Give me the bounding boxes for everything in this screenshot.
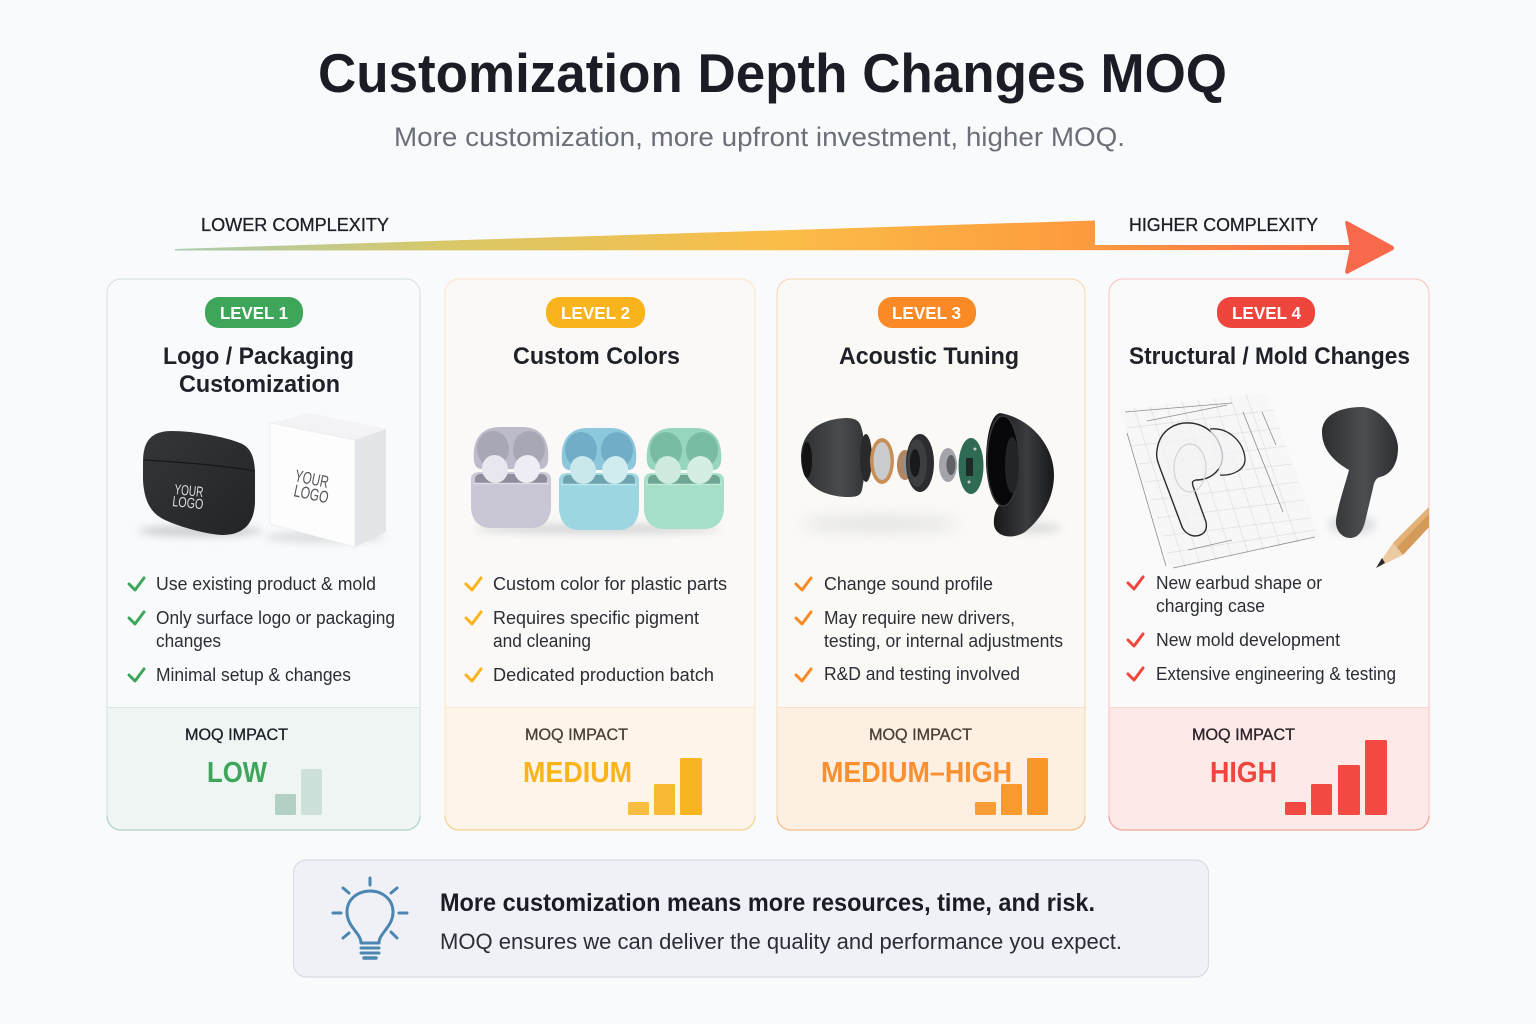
illustration: three coloured cases [471,427,724,534]
check list: Minimal setup & changes [156,665,351,685]
check list: testing, or internal adjustments [824,631,1063,651]
illustration: blueprint, earbud and pencil [1120,393,1430,569]
check list: changes [156,631,221,651]
check list: Only surface logo or packaging [156,608,395,628]
moq impact: medium-high: MEDIUM–HIGH [821,757,1012,789]
heading: logo / packaging [163,343,354,398]
check list: New mold development [1156,630,1340,650]
moq impact: medium: MOQ IMPACT [525,726,628,744]
panel: level 1 [107,279,420,830]
check list [466,574,727,685]
check list [1128,573,1396,684]
check list: R&D and testing involved [824,664,1020,684]
panel: level 4 [1109,279,1430,830]
badge: level 4: LEVEL 4 [1232,303,1301,323]
moq impact: high: HIGH [1210,757,1277,789]
moq impact: high [1192,726,1387,815]
badge: level 3: LEVEL 3 [892,303,961,323]
check list [796,574,1063,684]
badge: level 2 [546,297,645,328]
moq impact: medium-high: MOQ IMPACT [869,726,972,744]
label: higher complexity: HIGHER COMPLEXITY [1129,215,1318,235]
check list: Custom color for plastic parts [493,574,727,594]
check list: Change sound profile [824,574,993,594]
heading: logo / packaging: Customization [179,371,340,398]
illustration: black case and white box: LOGO [172,494,204,513]
moq impact: low [185,726,322,815]
check list: charging case [1156,596,1265,616]
check list: Extensive engineering & testing [1156,664,1396,684]
callout heading: More customization means more resources, time, and risk. [440,889,1095,917]
moq impact: medium: MEDIUM [523,757,632,789]
heading: logo / packaging: Logo / Packaging [163,343,354,370]
badge: level 2: LEVEL 2 [561,303,630,323]
label: lower complexity: LOWER COMPLEXITY [201,215,389,235]
check list: New earbud shape or [1156,573,1322,593]
badge: level 4 [1217,297,1315,328]
badge: level 1 [205,297,303,328]
icon: light bulb [333,878,407,958]
heading: structural / mold changes: Structural / Mold Changes [1129,343,1410,370]
check list: and cleaning [493,631,591,651]
check list: Requires specific pigment [493,608,699,628]
illustration: black case and white box: LOGO [292,481,330,507]
complexity arrow [175,220,1394,274]
moq impact: low: MOQ IMPACT [185,726,288,744]
heading: acoustic tuning: Acoustic Tuning [839,343,1019,370]
check list: Use existing product & mold [156,574,376,594]
panel: level 3 [777,279,1085,830]
moq impact: medium-high [821,726,1048,815]
moq impact: medium [523,726,702,815]
callout panel [294,860,1208,977]
illustration: black case and white box [138,413,386,547]
moq impact: low: LOW [207,757,268,789]
moq impact: high: MOQ IMPACT [1192,726,1295,744]
illustration: black case and white box: YOUR [174,482,204,501]
panel: level 2 [445,279,755,830]
illustration: exploded earbud [800,413,1062,536]
check list: Dedicated production batch [493,665,714,685]
title: Customization Depth Changes MOQ [318,42,1227,104]
check list [129,574,395,685]
illustration: black case and white box: YOUR [293,466,330,492]
check list: May require new drivers, [824,608,1015,628]
callout body: MOQ ensures we can deliver the quality and performance you expect. [440,929,1122,954]
badge: level 1: LEVEL 1 [220,303,288,323]
badge: level 3 [878,297,976,328]
subtitle: More customization, more upfront investment, higher MOQ. [394,122,1125,152]
heading: custom colors: Custom Colors [513,343,680,370]
